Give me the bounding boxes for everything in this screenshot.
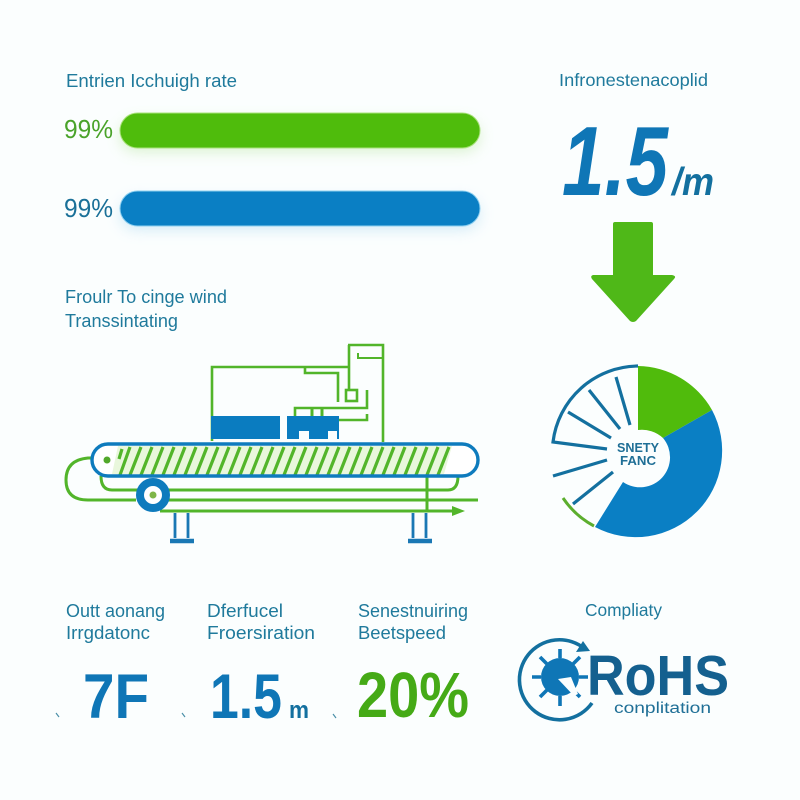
metric: outgoing: [56, 601, 165, 732]
bar: green 99%: [64, 113, 480, 152]
value: 1.5 /m: 1.5: [562, 106, 669, 216]
illustration: conveyor: [66, 345, 478, 541]
heading: compliance: Compliaty: [585, 600, 662, 620]
arrow: green down: [591, 222, 675, 322]
belt outline: [92, 444, 478, 476]
legs: [170, 513, 432, 541]
metric: differential: [182, 601, 315, 732]
ring: green arc: [563, 498, 594, 526]
heading: conveyor: Froulr To cinge wind: [65, 287, 227, 307]
metric: belt speed: 20%: [357, 659, 469, 731]
hatch fill: [119, 447, 449, 475]
lower green belts: [66, 458, 478, 512]
logo text: RoHS: RoHS: [587, 644, 729, 708]
centre label: [617, 441, 660, 468]
metric: belt speed: Senestnuiring: [358, 601, 468, 621]
ring: outline arc: [553, 366, 638, 449]
heading: metric: Infronestenacoplid: [559, 70, 708, 90]
wedge: green: [638, 366, 712, 438]
heading: bars: Entrien Icchuigh rate: [66, 70, 237, 91]
spokes: [553, 377, 630, 504]
bar: blue 99%: 99%: [64, 193, 113, 223]
left pulley dot: [104, 456, 110, 464]
centre label: SNETY: [617, 441, 660, 455]
caption: compliance: conplitation: [614, 700, 711, 717]
panel: top right metric: [559, 70, 714, 216]
bar: green 99%: 99%: [64, 114, 113, 144]
heading: conveyor: [65, 287, 227, 331]
metric: belt speed: [333, 601, 469, 731]
metric: differential: Dferfucel: [207, 601, 283, 621]
arrowhead: [452, 506, 465, 516]
panel: compliance: [519, 600, 729, 720]
metric: differential: Froersiration: [207, 623, 315, 643]
pulley: [140, 482, 166, 508]
metric: belt speed: Beetspeed: [358, 623, 446, 643]
metric: outgoing: Irrgdatonc: [66, 623, 150, 643]
metric: outgoing: Outt aonang: [66, 601, 165, 621]
panel: bottom metrics: [56, 601, 469, 732]
panel: top right metric: /m: [670, 161, 714, 204]
belt fill: [92, 444, 478, 476]
wedge: blue: [595, 410, 722, 537]
blue blocks: [211, 416, 339, 439]
metric: differential: m: [289, 697, 309, 724]
icon: RoHS gear and cycle: [519, 640, 592, 720]
centre label: FANC: [620, 454, 656, 468]
panel: top progress bars: [64, 70, 480, 230]
machine frame: [212, 345, 383, 442]
bar: blue 99%: [64, 191, 480, 230]
metric: differential: 1.5: [210, 662, 282, 732]
heading: conveyor: Transsintating: [65, 311, 178, 331]
metric: outgoing: 7F: [83, 662, 149, 732]
chart: pie: [553, 366, 722, 537]
